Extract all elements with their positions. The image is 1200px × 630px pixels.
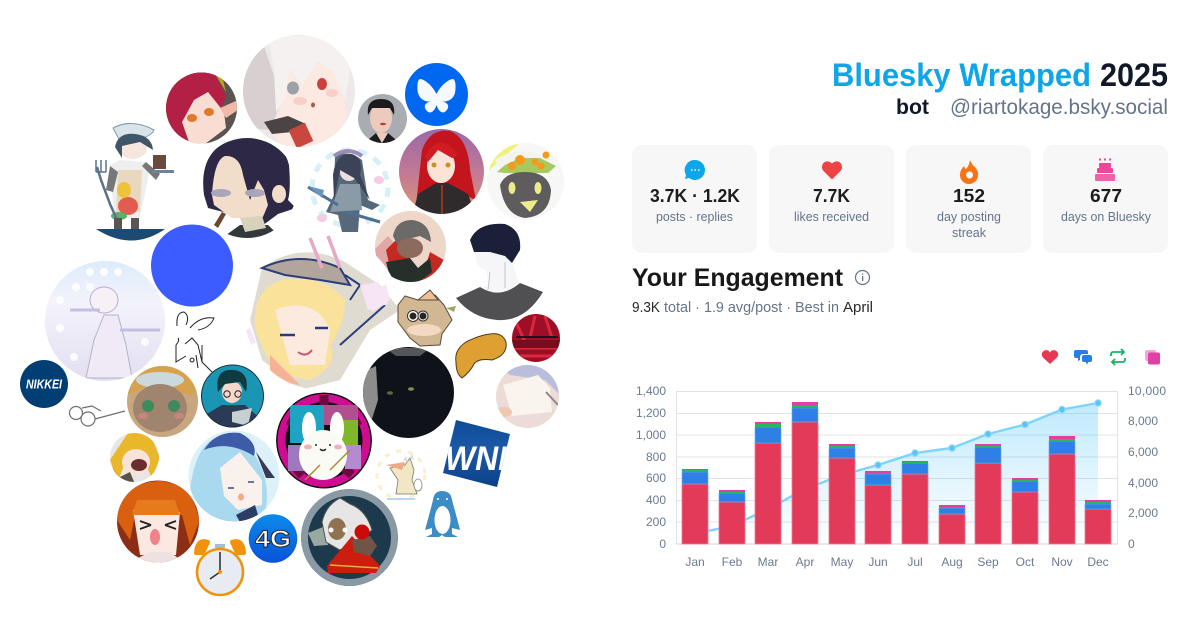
right axis labels: [1128, 384, 1166, 551]
bars: quotes: [682, 402, 1111, 507]
left axis labels: 800: [646, 450, 666, 464]
avatar: white haired girl: [243, 35, 355, 147]
month labels: Nov: [1051, 555, 1073, 569]
avatar: boy with glasses on teal: [200, 364, 266, 430]
stat card: streak: [906, 145, 1031, 253]
left axis labels: 1,000: [636, 428, 666, 442]
right axis labels: 6,000: [1128, 445, 1158, 459]
stat card: likes: [769, 145, 894, 253]
engagement summary: 9.3K: [632, 300, 660, 316]
month labels: Aug: [941, 555, 963, 569]
icon: cake: [1095, 160, 1115, 181]
avatar: red neon: [512, 314, 560, 362]
month labels: Sep: [977, 555, 999, 569]
avatar: black haired man in profile: [456, 224, 543, 320]
left axis labels: 400: [646, 493, 666, 507]
line points: [875, 400, 1101, 468]
avatar: penguin: [425, 491, 460, 537]
header: title: Bluesky Wrapped: [832, 57, 1091, 93]
avatar: dark haired man: [203, 138, 294, 238]
header: title: 2025: [1100, 57, 1168, 93]
left axis labels: 0: [659, 537, 666, 551]
avatar cluster: [20, 30, 566, 595]
month labels: Jul: [907, 555, 923, 569]
cumulative area: [695, 403, 1098, 544]
right axis labels: 0: [1128, 537, 1135, 551]
right axis labels: 8,000: [1128, 414, 1158, 428]
avatar: bluesky logo: [405, 63, 468, 126]
left axis labels: 1,200: [636, 406, 666, 420]
right axis labels: 2,000: [1128, 506, 1158, 520]
stat card: posts and replies: posts · replies: [656, 210, 733, 224]
month labels: Apr: [796, 555, 814, 569]
icon: info: [856, 270, 870, 284]
avatar: WNI logo: WNI: [445, 440, 508, 478]
avatar: person photo: [358, 94, 407, 143]
month labels: Oct: [1016, 555, 1035, 569]
stat card: posts and replies: [632, 145, 757, 253]
avatar: bunny sketch: [176, 312, 214, 372]
avatar: NIKKEI logo: NIKKEI: [26, 378, 62, 392]
legend icons: [1042, 349, 1160, 365]
avatar: toast character: [495, 364, 560, 429]
avatar: red haired girl: [165, 72, 238, 145]
month labels: [685, 555, 1109, 569]
stat card: streak: 152: [953, 185, 985, 206]
avatar: grey haired girl in red: [374, 210, 448, 284]
icon: chat bubble: [685, 160, 705, 180]
bars: reposts: [682, 405, 1111, 508]
avatar: red caped knight: [301, 489, 398, 586]
month labels: Dec: [1087, 555, 1109, 569]
month labels: Jun: [868, 555, 888, 569]
legend: reposts: [1111, 349, 1125, 365]
avatar: yellow haired girl with hat: [246, 236, 398, 388]
right axis labels: 10,000: [1128, 384, 1166, 398]
avatar: red haired woman in black: [398, 128, 486, 216]
avatar: round glasses: [70, 406, 125, 426]
avatar: black cat: [363, 347, 454, 438]
avatar: 4G logo: 4G: [255, 526, 291, 553]
avatar: chef with cake: [96, 123, 174, 240]
bars: replies: [682, 408, 1111, 514]
left axis labels: 600: [646, 471, 666, 485]
chart: monthly engagement stacked bars with cumulative line: [636, 384, 1166, 569]
month labels: Jan: [685, 555, 705, 569]
month labels: Feb: [722, 555, 743, 569]
avatar: golden cuttlefish: [456, 334, 506, 378]
month labels: May: [831, 555, 853, 569]
cumulative line: [695, 403, 1098, 534]
avatar: pale sketch lady: [45, 261, 165, 381]
avatar: cat-eared brown character: [398, 290, 456, 346]
avatar: NIKKEI logo: [20, 360, 68, 408]
avatar: black creature with flower crown: [486, 142, 566, 222]
icon: flame: [960, 160, 978, 184]
header: handle: @riartokage.bsky.social: [950, 96, 1168, 119]
avatar: blue haired girl: [188, 430, 280, 522]
avatar: girl with spear: [308, 150, 388, 232]
legend: likes: [1042, 350, 1058, 364]
avatar: 4G logo: [249, 514, 297, 563]
month labels: Mar: [758, 555, 778, 569]
avatar: orange haired girl: [115, 480, 201, 565]
stat card: days on Bluesky: [1043, 145, 1168, 253]
avatar: alarm clock: [196, 541, 244, 595]
stat card: streak: streak: [952, 226, 987, 240]
stat card: streak: day posting: [937, 210, 1001, 224]
left axis labels: 1,400: [636, 384, 666, 398]
engagement heading: Your Engagement: [632, 264, 844, 292]
bars: likes: [682, 422, 1111, 544]
avatar: blue circle: [151, 224, 233, 306]
engagement summary: total · 1.9 avg/post · Best in: [664, 300, 839, 316]
left axis labels: 200: [646, 515, 666, 529]
left axis labels: [636, 384, 666, 551]
avatar: WNI logo: [443, 420, 510, 487]
legend: replies: [1074, 350, 1092, 364]
stat card: likes: likes received: [794, 210, 869, 224]
avatar: stained-glass rabbit: [276, 392, 372, 488]
avatar: doll photo: [127, 366, 198, 437]
grid lines: [676, 391, 1118, 544]
stat card: likes: 7.7K: [813, 185, 851, 206]
stat card: posts and replies: 3.7K · 1.2K: [650, 185, 741, 206]
avatar: fox in apron: [377, 451, 425, 500]
stat card: days on Bluesky: days on Bluesky: [1061, 210, 1152, 224]
decoration: pink diamond: [366, 284, 390, 312]
stat card: days on Bluesky: 677: [1090, 185, 1122, 206]
icon: heart: [822, 161, 842, 180]
right axis labels: 4,000: [1128, 476, 1158, 490]
legend: quotes: [1145, 350, 1160, 364]
avatar: screaming yellow haired girl: [110, 433, 159, 482]
header: display name: bot: [896, 96, 929, 119]
engagement summary: April: [843, 300, 873, 316]
